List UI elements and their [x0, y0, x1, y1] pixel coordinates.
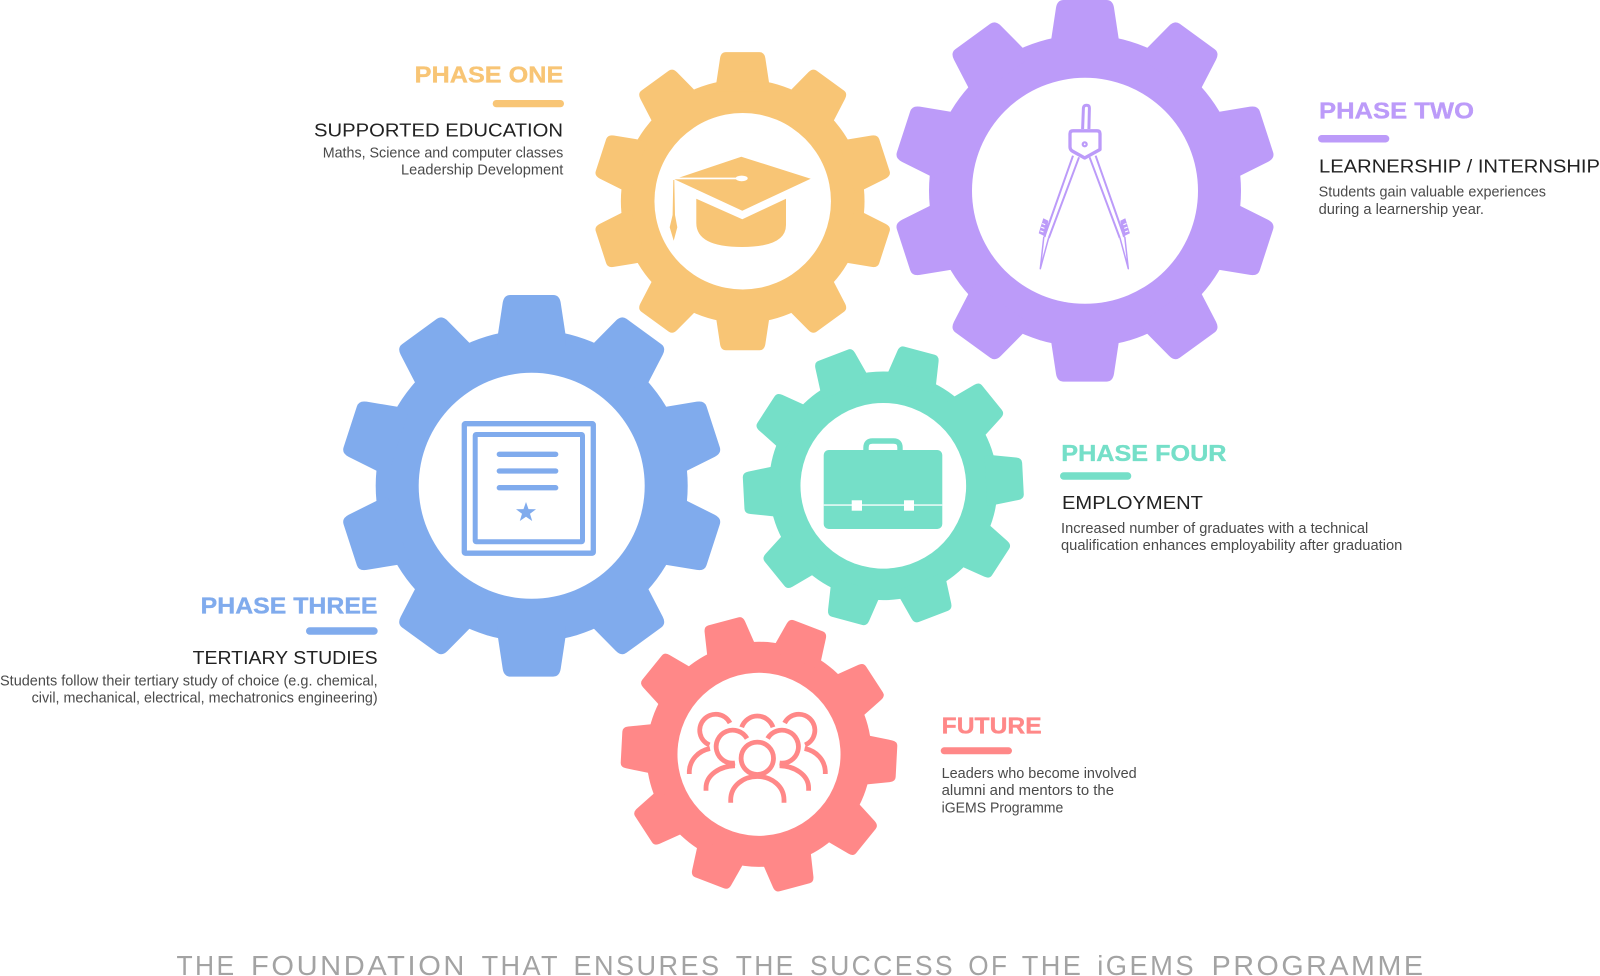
description: future: iGEMS Programme — [942, 799, 1063, 816]
text block: phase four — [1060, 440, 1402, 554]
text block: phase three — [0, 592, 378, 707]
text block: future — [941, 712, 1137, 816]
title: bottom caption — [176, 950, 1426, 976]
subheading: learnership / internship: LEARNERSHIP / INTERNSHIP — [1319, 156, 1600, 177]
heading: phase one: PHASE ONE — [415, 62, 563, 88]
description: phase two: Students gain valuable experiences — [1319, 184, 1546, 201]
description: phase two — [1319, 184, 1546, 218]
description: phase two: during a learnership year. — [1319, 201, 1484, 218]
icon: framed certificate — [464, 424, 593, 553]
heading: phase two: PHASE TWO — [1319, 97, 1474, 123]
heading: phase three: PHASE THREE — [201, 592, 378, 618]
description: future: Leaders who become involved — [942, 765, 1137, 782]
icon: drawing compass — [1039, 105, 1130, 269]
accent bar: future — [941, 747, 1012, 754]
gear: phase two (purple) — [893, 0, 1277, 382]
description: phase four: Increased number of graduates with a technical — [1061, 520, 1368, 537]
description: phase four — [1061, 520, 1402, 554]
description: future: alumni and mentors to the — [942, 782, 1114, 799]
icon: graduation cap — [670, 157, 811, 247]
accent bar: phase four — [1060, 472, 1131, 480]
gear: phase three (blue) — [340, 295, 724, 677]
description: future — [942, 765, 1137, 816]
subheading: tertiary studies: TERTIARY STUDIES — [193, 647, 378, 668]
gear: phase one (yellow) — [593, 52, 893, 350]
accent bar: phase two — [1318, 135, 1389, 142]
icon: group of people — [689, 714, 825, 803]
text block: phase two — [1318, 97, 1600, 218]
subheading: employment: EMPLOYMENT — [1062, 492, 1203, 513]
subheading: supported education: SUPPORTED EDUCATION — [314, 120, 563, 141]
gear: phase four (teal) — [711, 314, 1055, 657]
heading: future: FUTURE — [942, 712, 1042, 738]
description: phase three — [0, 673, 378, 707]
description: phase one: Leadership Development — [401, 162, 564, 178]
heading: phase four: PHASE FOUR — [1061, 440, 1227, 466]
text block: phase one — [314, 62, 564, 178]
gear: future (red) — [590, 585, 928, 923]
description: phase three: Students follow their tertiary study of choice (e.g. chemical, — [0, 673, 378, 690]
accent bar: phase three — [306, 627, 378, 635]
description: phase four: qualification enhances employability after graduation — [1061, 537, 1402, 554]
icon: briefcase — [824, 441, 942, 529]
accent bar: phase one — [493, 100, 564, 107]
description: phase three: civil, mechanical, electrical, mechatronics engineering) — [32, 690, 378, 707]
description: phase one: Maths, Science and computer classes — [323, 144, 563, 161]
description: phase one — [323, 144, 564, 178]
